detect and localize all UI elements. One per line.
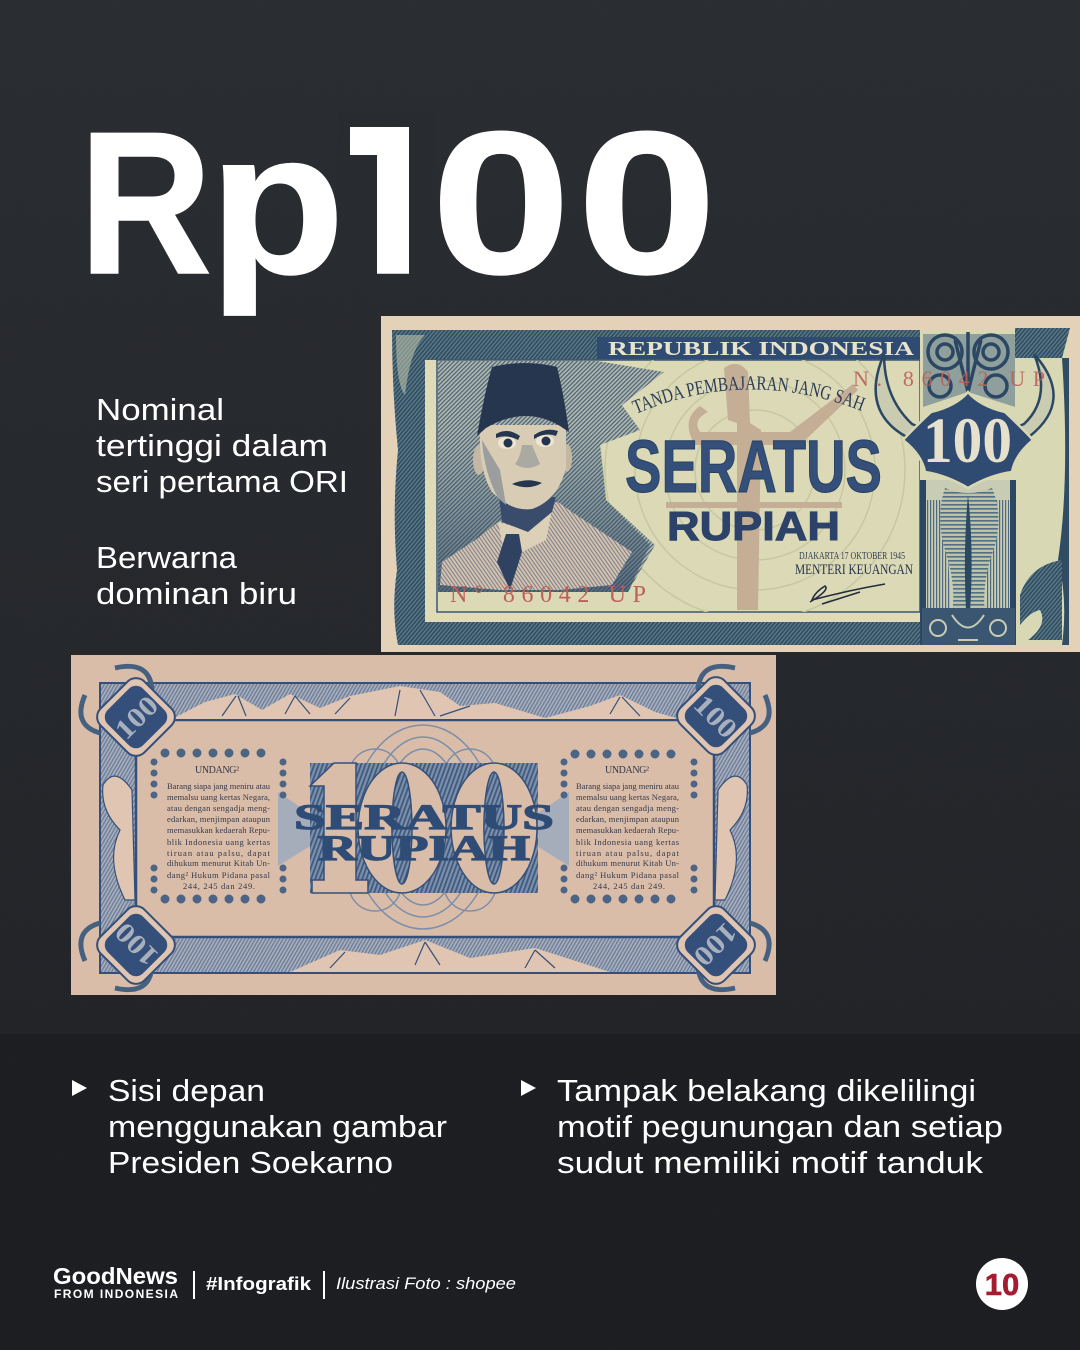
corner bottom right: 100 [687, 916, 743, 972]
law text right: blik Indonesia uang kertas [576, 837, 679, 847]
paper [381, 316, 1080, 652]
right horn [1006, 354, 1054, 446]
law text left: 244, 245 dan 249. [183, 881, 255, 891]
dagger watermark [666, 364, 858, 610]
bullet left: menggunakan gambar [108, 1109, 447, 1144]
centre numeral block [310, 763, 538, 893]
arched heading: TANDA PEMBAJARAN JANG SAH [631, 376, 866, 414]
minister: MENTERI KEUANGAN [795, 562, 913, 578]
numeral 100 [310, 763, 537, 893]
logo [53, 1263, 178, 1301]
corner bottom left: 100 [109, 916, 165, 972]
law text right: UNDANG² [605, 765, 649, 776]
law text left: tiruan atau palsu, dapat [167, 848, 271, 858]
cream strip [425, 360, 920, 622]
photo credit: Ilustrasi Foto : shopee [336, 1274, 516, 1293]
arrow [72, 1080, 87, 1096]
bottom band [0, 1034, 1080, 1350]
elephant head [1020, 560, 1062, 640]
horns [81, 666, 769, 990]
law text right: atau dengan sengadja meng- [576, 803, 679, 813]
title [79, 90, 717, 317]
text block: description: Berwarna [96, 540, 238, 575]
left horn [876, 354, 930, 446]
page number: 10 [985, 1267, 1019, 1302]
mountains bottom [290, 940, 610, 972]
numeral shield [903, 392, 1033, 488]
law text left: edarkan, menjimpan ataupun [167, 814, 271, 824]
RUPIAH: RUPIAH [318, 828, 530, 868]
SERATUS: SERATUS [294, 797, 554, 837]
frame corner scroll [396, 335, 425, 395]
bullet left: Presiden Soekarno [108, 1145, 393, 1180]
signature [810, 584, 885, 604]
serial number left: N° 86042 UP [450, 582, 646, 608]
law text left: dihukum menurut Kitab Un- [167, 858, 270, 868]
law text right: dang² Hukum Pidana pasal [576, 870, 680, 880]
bullet right: sudut memiliki motif tanduk [557, 1145, 984, 1180]
law text right: Barang siapa jang meniru atau [576, 781, 680, 791]
date: DJAKARTA 17 OKTOBER 1945 [799, 551, 905, 562]
law text right: edarkan, menjimpan ataupun [576, 814, 680, 824]
law text right [564, 754, 694, 899]
ornate frame [392, 330, 925, 645]
guilloche rings [604, 360, 906, 612]
top crest [923, 332, 1015, 407]
ornate border [100, 683, 750, 973]
law text left: Barang siapa jang meniru atau [167, 781, 271, 791]
title: 0 [577, 90, 717, 317]
banknote front [381, 316, 1080, 652]
SERATUS: SERATUS [625, 425, 882, 508]
arrow [521, 1080, 536, 1096]
law text right: 244, 245 dan 249. [593, 881, 665, 891]
title: 1 [340, 90, 428, 317]
corner bottom right [672, 901, 760, 989]
law text right: memasukkan kedaerah Repu- [576, 825, 679, 835]
top right serial: N. 86042 UP [853, 366, 1045, 391]
top banner [597, 337, 920, 359]
corner top right [672, 672, 760, 760]
logo: GoodNews [53, 1263, 178, 1289]
text block: description: tertinggi dalam [96, 428, 328, 463]
ornament ground [920, 330, 1068, 645]
title: p [209, 90, 345, 317]
corner top left [92, 673, 180, 761]
law text left: memasukkan kedaerah Repu- [167, 825, 270, 835]
law text left [154, 753, 283, 899]
right edge curl [1058, 358, 1069, 645]
law text left: memalsu uang kertas Negara, [167, 792, 270, 802]
title: R [79, 90, 212, 317]
law text left: dang² Hukum Pidana pasal [167, 870, 271, 880]
corner top right: 100 [687, 689, 743, 745]
numeral: 100 [923, 405, 1012, 477]
banner text: REPUBLIK INDONESIA [608, 338, 915, 360]
right ornament [853, 328, 1070, 645]
logo: FROM INDONESIA [54, 1287, 178, 1301]
paper [71, 655, 776, 995]
law text left: atau dengan sengadja meng- [167, 803, 270, 813]
banknote back [71, 655, 776, 995]
side clouds [103, 776, 747, 900]
footer [53, 1263, 516, 1301]
centre panel [437, 360, 920, 612]
text block: description [96, 392, 348, 611]
bullet left: Sisi depan [108, 1073, 265, 1108]
bullet right: motif pegunungan dan setiap [557, 1109, 1003, 1144]
text block: description: Nominal [96, 392, 224, 427]
mountains top [172, 686, 680, 719]
law text left: UNDANG² [195, 765, 239, 776]
corner bottom left [92, 901, 180, 989]
text block: description: seri pertama ORI [96, 464, 348, 499]
law text right: tiruan atau palsu, dapat [576, 848, 680, 858]
law text right: dihukum menurut Kitab Un- [576, 858, 679, 868]
law text left: blik Indonesia uang kertas [167, 837, 270, 847]
law text right: memalsu uang kertas Negara, [576, 792, 679, 802]
portrait [440, 363, 632, 590]
page number [976, 1258, 1028, 1310]
bullet right [521, 1073, 1003, 1180]
top right scroll [1015, 328, 1070, 358]
text block: description: dominan biru [96, 576, 297, 611]
corner top left: 100 [109, 690, 165, 746]
bullet right: Tampak belakang dikelilingi [557, 1073, 976, 1108]
side wings [278, 792, 569, 866]
background [0, 0, 1080, 1034]
hatching behind portrait [438, 361, 664, 592]
title: 0 [431, 90, 571, 317]
elephant column [920, 480, 1016, 645]
rosette [349, 725, 496, 929]
bullet left [72, 1073, 447, 1180]
hashtag: #Infografik [206, 1274, 312, 1294]
RUPIAH: RUPIAH [667, 503, 840, 549]
